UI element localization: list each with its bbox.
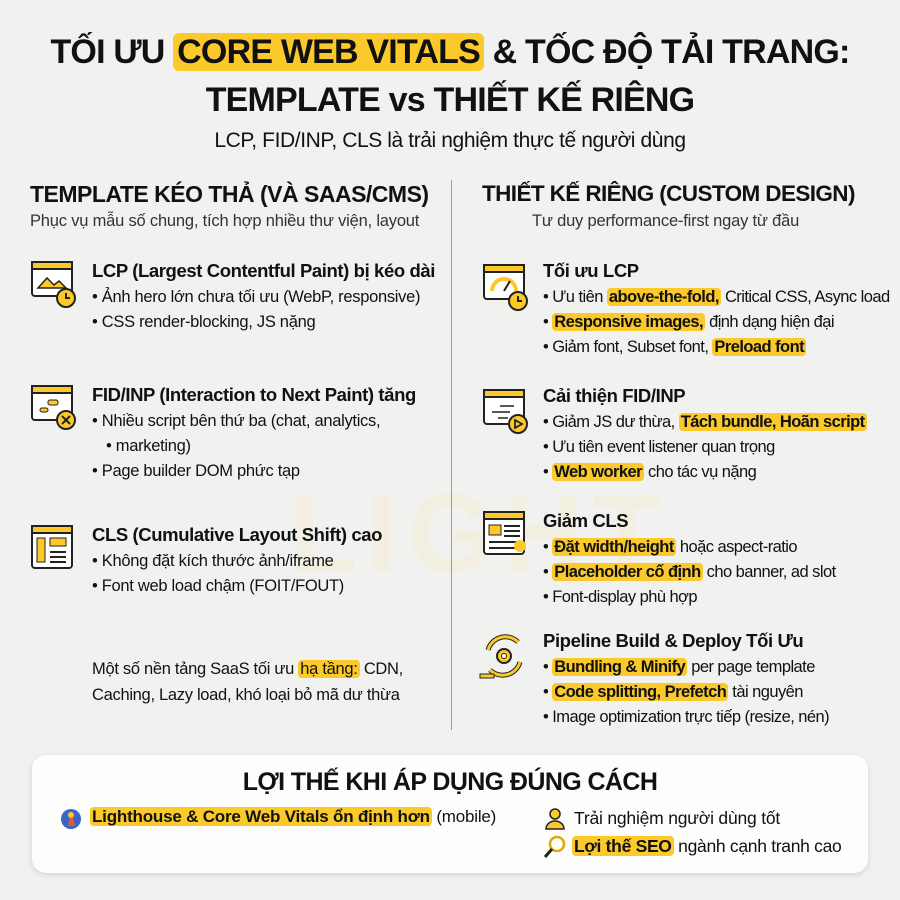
item: cls: Giảm CLS bbox=[543, 510, 628, 531]
item: lcp: Giảm font, Subset font, Preload font bbox=[552, 338, 804, 356]
item: fid: Ưu tiên event listener quan trọng bbox=[552, 438, 775, 456]
item: lcp: Ảnh hero lớn chưa tối ưu (WebP, responsive) bbox=[102, 288, 420, 306]
item: cls: Font-display phù hợp bbox=[552, 588, 697, 606]
heading: custom: THIẾT KẾ RIÊNG (CUSTOM DESIGN) bbox=[482, 181, 855, 206]
icon: user bbox=[545, 808, 565, 830]
icon: lighthouse bbox=[61, 809, 81, 829]
icon: search bbox=[544, 836, 566, 858]
item: fid bbox=[543, 385, 867, 481]
item: fid: Web worker cho tác vụ nặng bbox=[554, 463, 756, 481]
item: cls bbox=[543, 510, 836, 606]
panel: template bbox=[30, 181, 435, 704]
icon: pipeline bbox=[480, 634, 522, 678]
item: lcp: Responsive images, định dạng hiện đại bbox=[554, 313, 834, 331]
subtitle: LCP, FID/INP, CLS là trải nghiệm thực tế người dùng bbox=[214, 129, 686, 152]
title: TỐI ƯU CORE WEB VITALS & TỐC ĐỘ TẢI TRANG: bbox=[50, 33, 850, 71]
item: cls: CLS (Cumulative Layout Shift) cao bbox=[92, 524, 382, 545]
panel: custom bbox=[480, 181, 890, 726]
item: fid: Cải thiện FID/INP bbox=[543, 385, 685, 406]
item: lcp: Ưu tiên above-the-fold, Critical CSS, Async load bbox=[552, 288, 890, 306]
note: saas: Caching, Lazy load, khó loại bỏ mã dư thừa bbox=[92, 686, 400, 704]
item: fid: Page builder DOM phức tạp bbox=[102, 462, 300, 480]
item: lcp: Tối ưu LCP bbox=[543, 260, 639, 281]
item: pipeline bbox=[543, 630, 829, 726]
item: fid: marketing) bbox=[116, 437, 191, 455]
item: lcp bbox=[543, 260, 890, 356]
icon: lcp gauge bbox=[483, 264, 528, 311]
item: lcp: LCP (Largest Contentful Paint) bị kéo dài bbox=[92, 260, 435, 281]
item: cls: Placeholder cố định cho banner, ad slot bbox=[554, 563, 836, 581]
benefit: lighthouse: Lighthouse & Core Web Vitals ổn định hơn (mobile) bbox=[92, 807, 496, 826]
title bbox=[50, 32, 850, 119]
item: cls: Đặt width/height hoặc aspect-ratio bbox=[554, 538, 797, 556]
benefit: seo: Lợi thế SEO ngành cạnh tranh cao bbox=[574, 836, 842, 856]
note: saas: Một số nền tảng SaaS tối ưu hạ tầng: CDN, bbox=[92, 660, 403, 678]
note: saas bbox=[92, 660, 403, 704]
item: cls bbox=[92, 524, 382, 595]
heading: template: TEMPLATE KÉO THẢ (VÀ SAAS/CMS) bbox=[30, 181, 429, 207]
item: lcp: CSS render-blocking, JS nặng bbox=[102, 313, 315, 331]
icon: cls bbox=[483, 511, 526, 555]
item: fid: Nhiều script bên thứ ba (chat, analytics, bbox=[102, 412, 380, 430]
item: fid: FID/INP (Interaction to Next Paint) tăng bbox=[92, 384, 416, 405]
item: cls: Font web load chậm (FOIT/FOUT) bbox=[102, 577, 344, 595]
title: TEMPLATE vs THIẾT KẾ RIÊNG bbox=[206, 81, 694, 119]
item: fid bbox=[92, 384, 416, 480]
subtext: Phục vụ mẫu số chung, tích hợp nhiều thư viện, layout bbox=[30, 212, 419, 230]
item: fid: Giảm JS dư thừa, Tách bundle, Hoãn script bbox=[552, 413, 865, 431]
icon: lcp bbox=[31, 261, 76, 308]
item: cls: Không đặt kích thước ảnh/iframe bbox=[102, 552, 334, 570]
benefit: ux: Trải nghiệm người dùng tốt bbox=[574, 808, 780, 828]
icon: cls bbox=[31, 525, 73, 569]
subtext: Tư duy performance-first ngay từ đầu bbox=[532, 212, 799, 230]
icon: fid bbox=[31, 385, 76, 430]
item: pipeline: Code splitting, Prefetch tài nguyên bbox=[554, 683, 803, 701]
watermark: LIGHT bbox=[290, 472, 670, 595]
heading: benefits: LỢI THẾ KHI ÁP DỤNG ĐÚNG CÁCH bbox=[243, 768, 657, 796]
panel: benefits bbox=[32, 755, 868, 873]
item: pipeline: Image optimization trực tiếp (resize, nén) bbox=[552, 708, 829, 726]
item: pipeline: Bundling & Minify per page template bbox=[554, 658, 815, 676]
item: pipeline: Pipeline Build & Deploy Tối Ưu bbox=[543, 630, 803, 651]
divider bbox=[451, 180, 452, 730]
icon: fid bbox=[483, 389, 528, 434]
item: lcp bbox=[92, 260, 435, 331]
